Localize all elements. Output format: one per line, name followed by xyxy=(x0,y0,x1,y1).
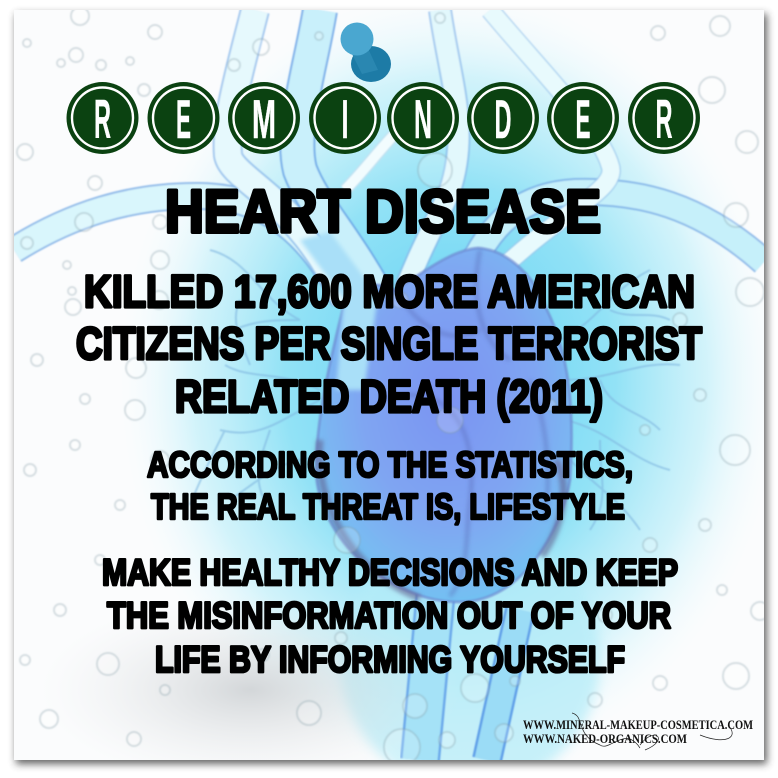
upper blood vessels xyxy=(14,10,764,320)
heart chamber details xyxy=(385,250,548,596)
badge N: N xyxy=(414,88,432,150)
badge R xyxy=(628,82,700,154)
blue glow behind heart xyxy=(147,22,752,694)
dark muscle edge xyxy=(319,440,563,598)
badge R: R xyxy=(656,88,672,150)
badge I: I xyxy=(342,88,348,150)
lower blue wash xyxy=(340,554,604,760)
website credits: WWW.NAKED-ORGANICS.COM xyxy=(523,732,687,746)
lower blood vessels xyxy=(420,590,520,760)
icon: blue push pin xyxy=(340,22,391,82)
statistics statement: THE REAL THREAT IS, LIFESTYLE xyxy=(151,486,625,527)
badge I xyxy=(309,82,381,154)
title: HEART DISEASE xyxy=(165,178,601,245)
reminder badge row xyxy=(66,82,700,154)
badge E: E xyxy=(176,88,191,150)
statistics statement: ACCORDING TO THE STATISTICS, xyxy=(147,444,633,485)
badge N xyxy=(387,82,459,154)
statistics statement xyxy=(147,444,633,527)
main statistic text: KILLED 17,600 MORE AMERICAN xyxy=(84,266,695,317)
grey smudge at lower left xyxy=(112,630,397,752)
badge R: R xyxy=(94,88,111,150)
badge E xyxy=(547,82,619,154)
badge M xyxy=(228,82,300,154)
call to action: LIFE BY INFORMING YOURSELF xyxy=(155,639,625,680)
call to action xyxy=(102,552,678,680)
heart xyxy=(300,232,572,602)
badge D xyxy=(467,82,539,154)
main statistic text: RELATED DEATH (2011) xyxy=(175,371,603,422)
side capillaries xyxy=(190,250,680,530)
call to action: THE MISINFORMATION OUT OF YOUR xyxy=(107,595,671,636)
website credits xyxy=(523,713,753,750)
badge D: D xyxy=(494,88,512,150)
badge R xyxy=(66,82,138,154)
badge E: E xyxy=(576,88,590,150)
aorta and great vessels xyxy=(300,232,378,390)
badge M: M xyxy=(252,88,276,150)
badge E xyxy=(148,82,220,154)
main statistic text xyxy=(76,266,702,422)
